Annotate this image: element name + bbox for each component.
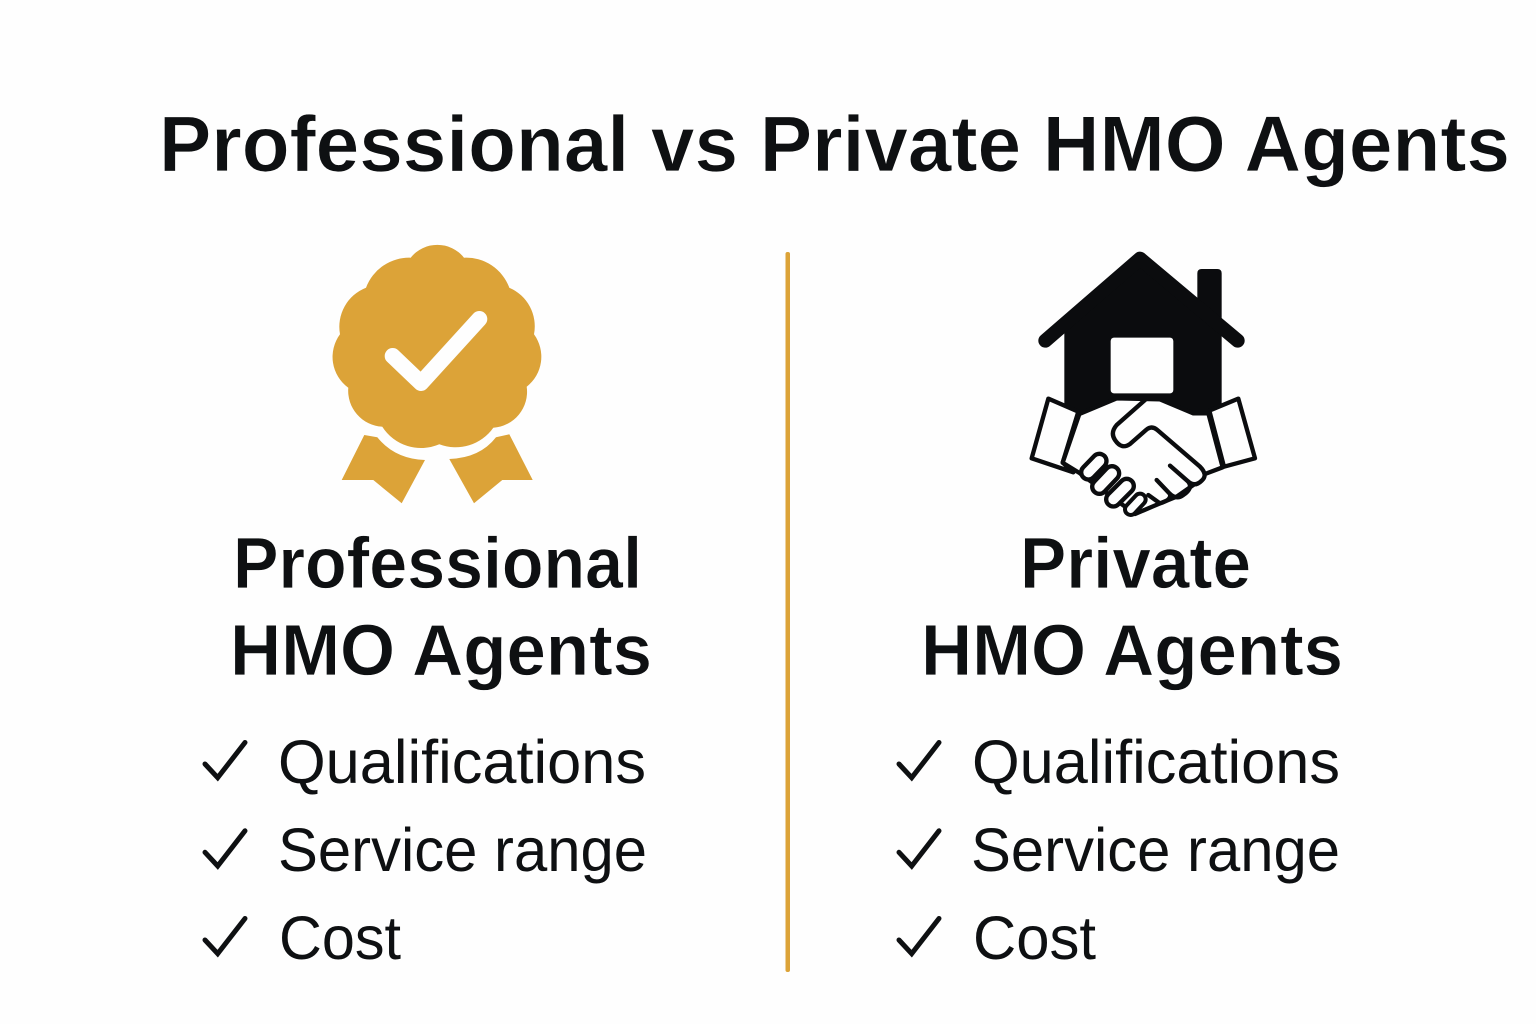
heading: private HMO agents: Private xyxy=(1020,524,1251,604)
title: Professional vs Private HMO Agents xyxy=(159,99,1510,188)
heading: professional HMO agents: HMO Agents xyxy=(230,611,652,691)
checklist: professional: Cost xyxy=(279,904,401,972)
heading: professional HMO agents xyxy=(230,524,652,691)
heading: professional HMO agents: Professional xyxy=(233,524,642,604)
checklist: private: Qualifications xyxy=(972,728,1340,796)
checklist: professional xyxy=(205,728,647,972)
panel: private HMO agents xyxy=(899,259,1343,972)
heading: private HMO agents: HMO Agents xyxy=(921,611,1343,691)
icon: award rosette with check xyxy=(333,245,541,503)
checklist: private xyxy=(899,728,1340,972)
checklist: private: Service range xyxy=(971,816,1340,884)
panel: professional HMO agents xyxy=(205,245,652,972)
checklist: private: Cost xyxy=(973,904,1096,972)
checklist: professional: Service range xyxy=(278,816,647,884)
heading: private HMO agents xyxy=(921,524,1343,691)
checklist: professional: Qualifications xyxy=(278,728,646,796)
icon: house with handshake xyxy=(1032,259,1255,514)
divider line xyxy=(786,252,790,972)
